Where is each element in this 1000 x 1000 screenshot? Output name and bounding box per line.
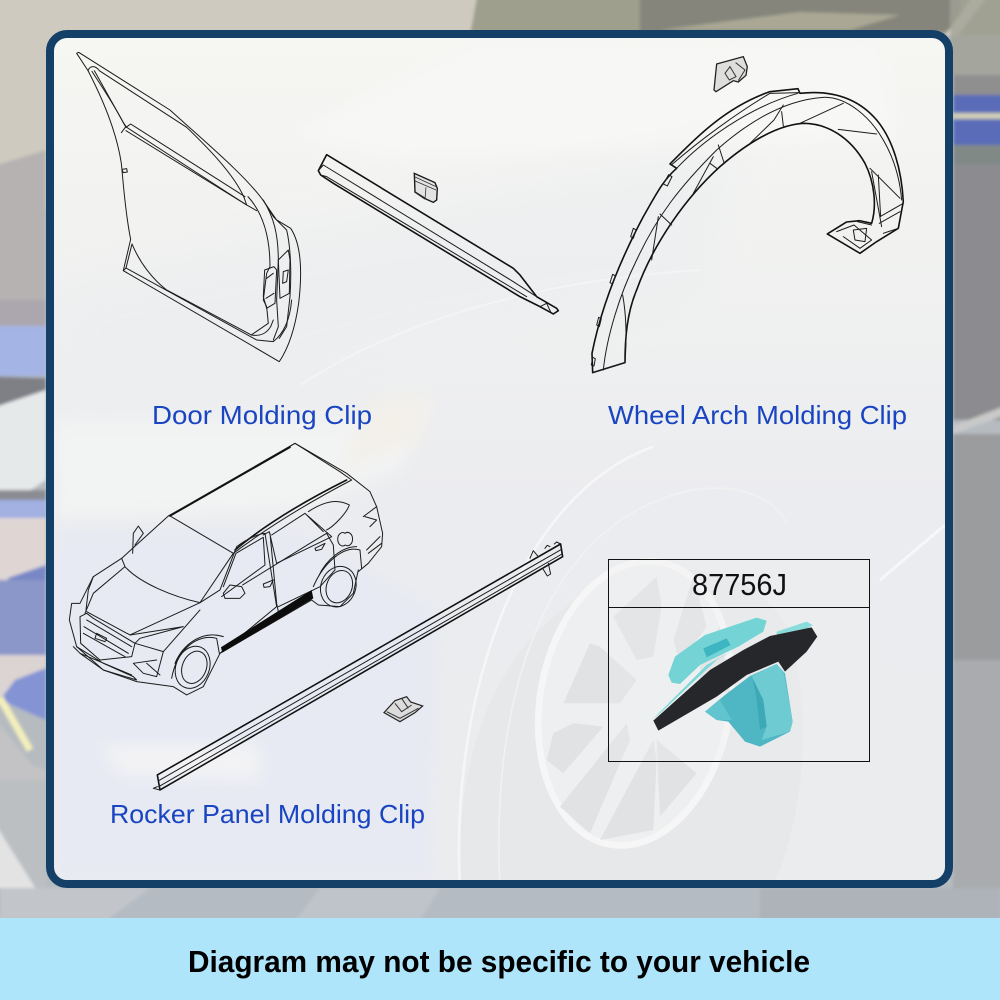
diagram: vehicle line drawing: [69, 443, 383, 695]
wheel and tyre ghost: [458, 446, 720, 880]
diagram: wheel arch molding: [591, 89, 903, 373]
label: wheel arch molding clip: Wheel Arch Molding Clip: [608, 400, 907, 430]
banner background: [0, 918, 1000, 1000]
part number: 87756J: [692, 567, 787, 602]
panel: diagram frame: [50, 34, 949, 887]
banner caption: Diagram may not be specific to your vehicle: [188, 944, 810, 979]
icon: rocker panel molding clip: [384, 697, 423, 722]
part box: 87756J: [608, 560, 870, 762]
icon: wheel arch molding clip: [714, 57, 747, 92]
diagram: rocker panel molding: [153, 542, 563, 790]
diagram: door molding strip: [318, 155, 558, 314]
diagram: door molding: [77, 52, 301, 362]
icon: door molding clip: [414, 173, 437, 202]
icon: clip photo: [653, 618, 817, 747]
label: rocker panel molding clip: Rocker Panel Molding Clip: [110, 799, 425, 829]
label: door molding clip: Door Molding Clip: [152, 400, 372, 430]
